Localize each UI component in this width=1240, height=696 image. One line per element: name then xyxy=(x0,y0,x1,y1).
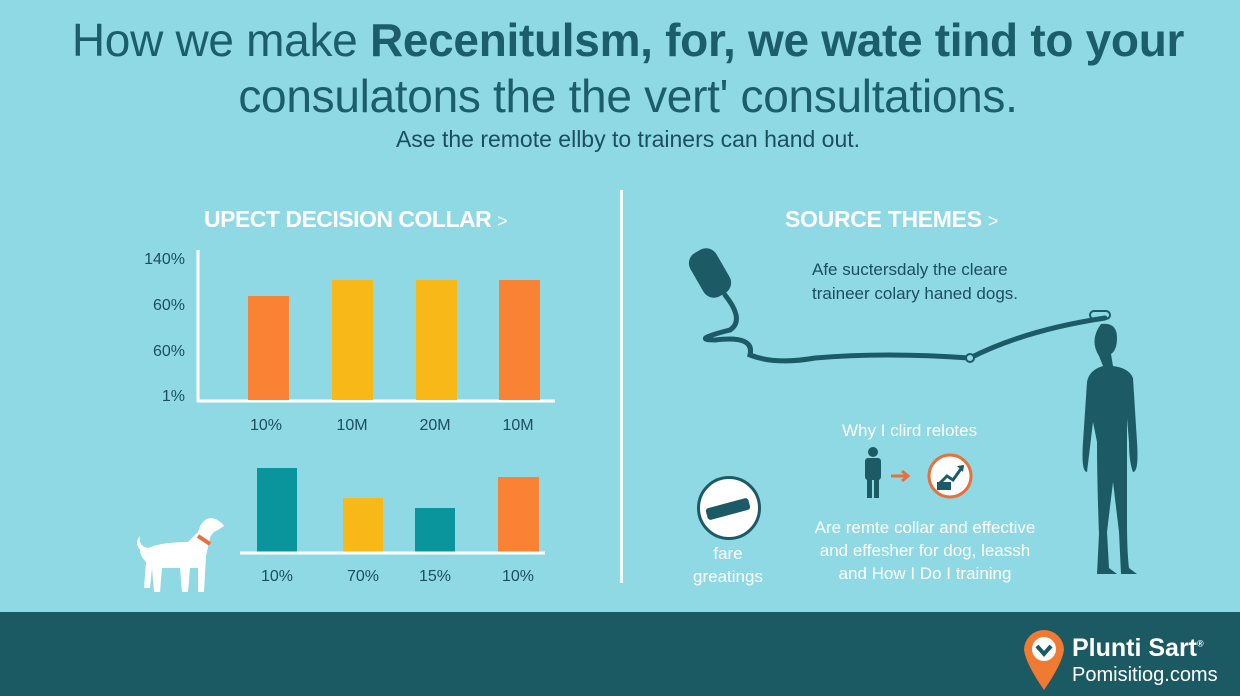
bar chart: bottom xyxy=(240,468,545,585)
title xyxy=(72,14,1184,122)
bar chart: bottom: 10% xyxy=(502,568,534,585)
bar chart: top: 140% xyxy=(144,251,185,268)
subtitle: Ase the remote ellby to trainers can hand out. xyxy=(396,126,860,152)
icon: leash xyxy=(688,248,1111,364)
bar chart: top: 60% xyxy=(153,297,185,314)
footer xyxy=(0,612,1240,696)
icon: remote xyxy=(697,476,761,540)
text block: right top: traineer colary haned dogs. xyxy=(812,284,1018,303)
text block: right bottom xyxy=(814,518,1035,583)
bar chart: bottom: 15% xyxy=(419,568,451,585)
bar chart: bottom: 70% xyxy=(347,568,379,585)
bar chart: top: 1% xyxy=(162,388,185,405)
text block: right bottom: and effesher for dog, leassh xyxy=(820,541,1030,560)
title: consulatons the the vert' consultations. xyxy=(238,70,1018,122)
divider xyxy=(620,190,623,583)
text block: right bottom: Are remte collar and effective xyxy=(815,518,1035,537)
logo: Pomisitiog.coms xyxy=(1072,664,1218,686)
heading: right panel: SOURCE THEMES > xyxy=(785,206,998,232)
bar chart: bottom: 10% xyxy=(261,568,293,585)
bar chart: top: 10M xyxy=(336,417,368,434)
bar chart: top: 60% xyxy=(153,343,185,360)
text: fare greatings: greatings xyxy=(693,567,763,586)
heading: left panel: UPECT DECISION COLLAR > xyxy=(204,206,507,232)
text: fare greatings: fare xyxy=(713,544,743,563)
icon: dog xyxy=(137,518,224,592)
bar chart: top xyxy=(144,250,555,434)
text block: right top: Afe suctersdaly the cleare xyxy=(812,260,1008,279)
logo: Plunti Sart® xyxy=(1072,634,1204,662)
icon: standing man silhouette xyxy=(1082,324,1138,574)
title: How we make Recenitulsm, for, we wate tind to your xyxy=(72,14,1184,66)
bar chart: top: 20M xyxy=(419,417,451,434)
bar chart: top: 10M xyxy=(502,417,534,434)
text block: right bottom: and How I Do I training xyxy=(839,564,1011,583)
logo xyxy=(1024,630,1218,690)
bar chart: top: 10% xyxy=(250,417,282,434)
icon: person to chart xyxy=(865,447,972,498)
text block: right top xyxy=(812,260,1018,303)
text: fare greatings xyxy=(693,544,763,586)
text: why I clird relotes: Why I clird relotes xyxy=(842,421,977,440)
